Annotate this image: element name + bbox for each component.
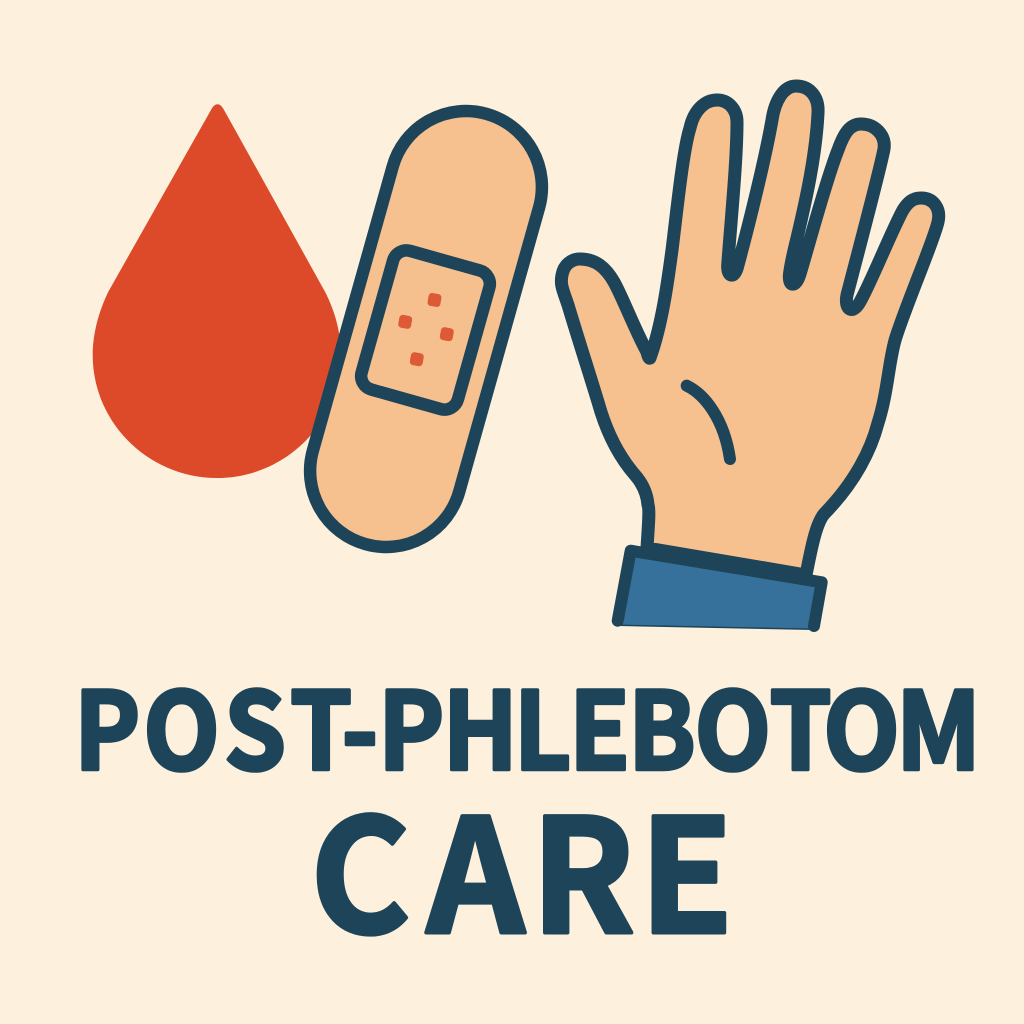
icon: open hand with sleeve xyxy=(561,86,939,629)
bandage pad xyxy=(358,247,493,413)
bandage dots xyxy=(398,292,454,367)
palm crease xyxy=(687,386,730,459)
icon: blood drop xyxy=(93,104,341,478)
title line 2: CARE xyxy=(310,751,733,978)
sleeve cuff xyxy=(618,551,822,629)
title line 1: POST-PHLEBOTOM xyxy=(74,645,981,801)
icon: adhesive bandage xyxy=(292,93,560,565)
title xyxy=(74,645,981,978)
